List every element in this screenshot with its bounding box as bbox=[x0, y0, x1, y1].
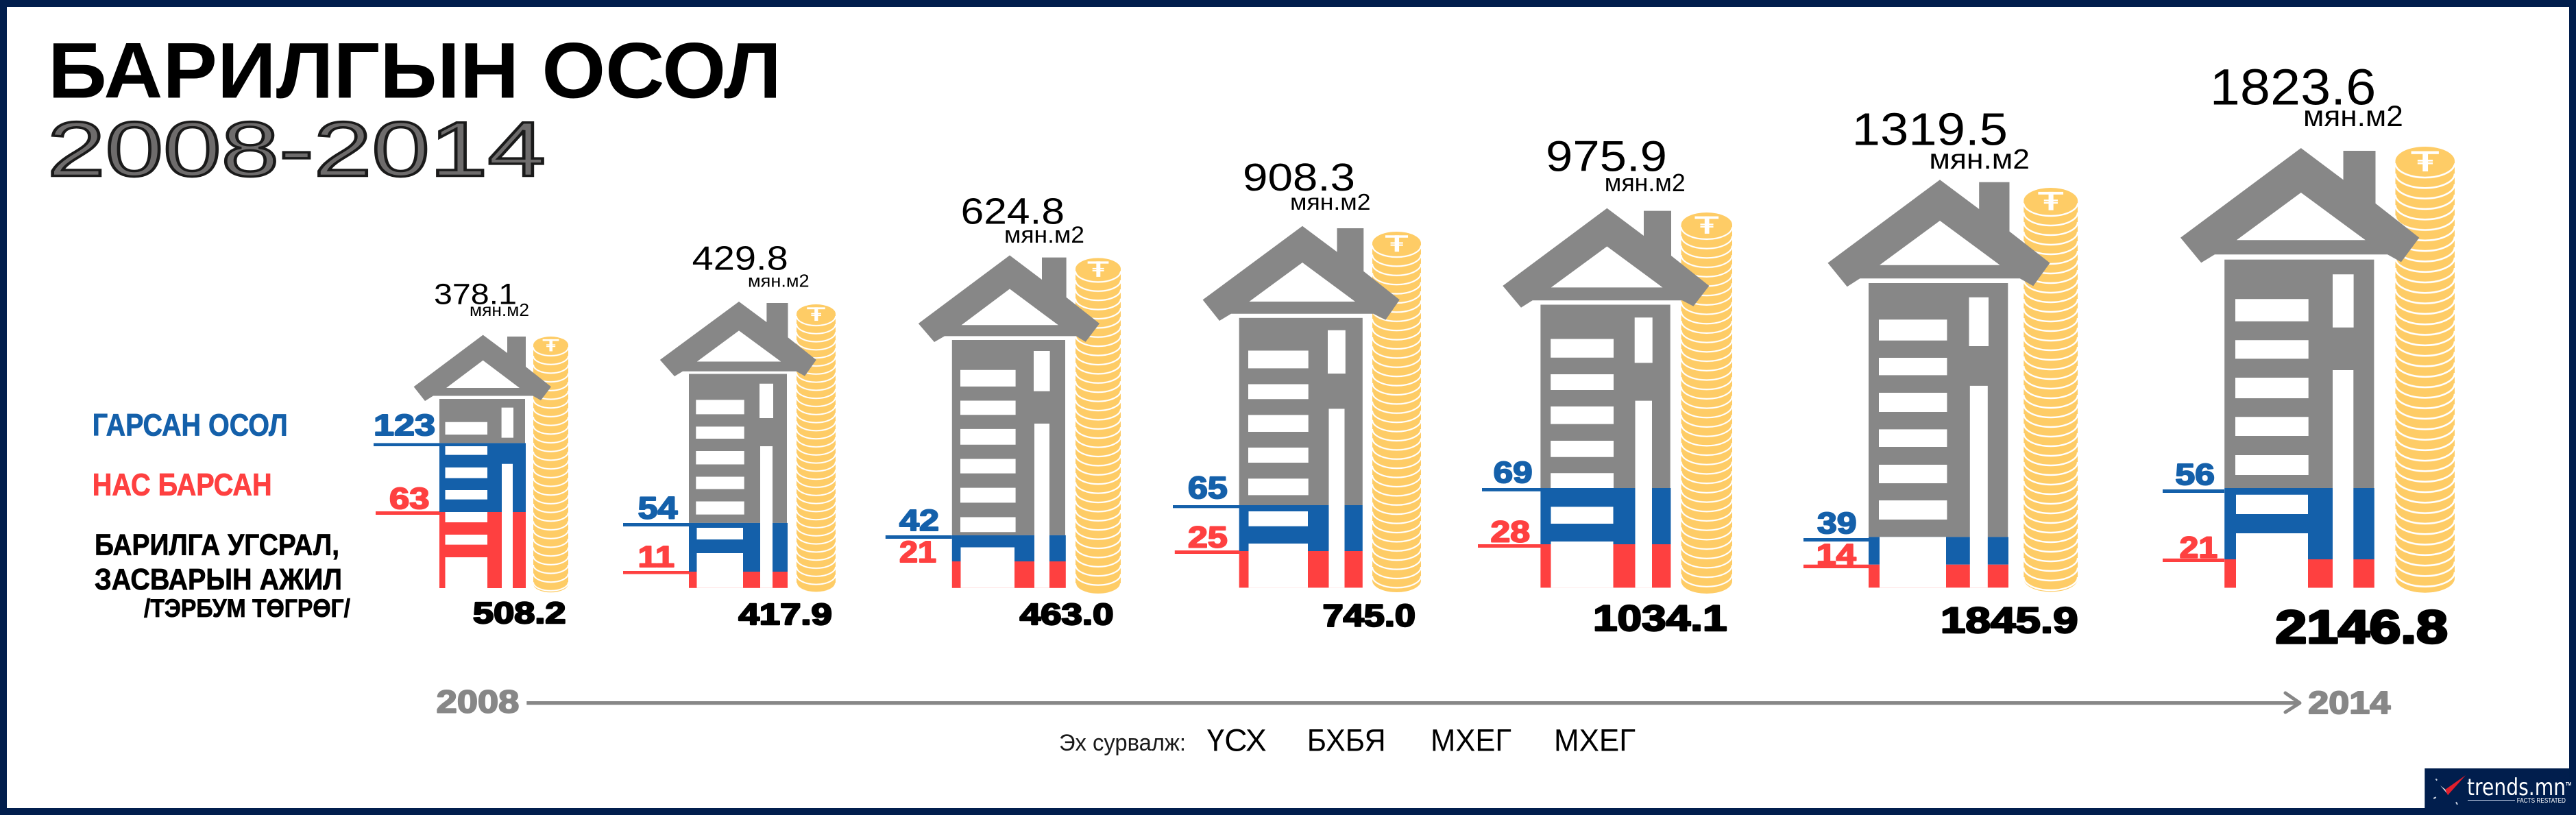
icon: house 2012 bbox=[1503, 208, 1709, 587]
legend: construction value: ЗАСВАРЫН АЖИЛ bbox=[95, 563, 342, 596]
accidents 65: 65 bbox=[1188, 470, 1228, 505]
year 2010 bbox=[886, 191, 1121, 631]
deaths line bbox=[1175, 550, 1239, 554]
timeline end 2014: 2014 bbox=[2308, 685, 2391, 720]
arrow bbox=[526, 693, 2300, 712]
deaths 11: 11 bbox=[638, 540, 675, 574]
area 1319.5: 1319.5 bbox=[1852, 104, 2008, 156]
source line: МХЕГ bbox=[1431, 723, 1511, 758]
tagline: FACTS RESTATED bbox=[2517, 797, 2566, 805]
accidents line bbox=[1803, 538, 1869, 542]
legend bbox=[93, 408, 350, 622]
year 2013 bbox=[1803, 104, 2078, 641]
deaths 25: 25 bbox=[1188, 520, 1228, 554]
deaths line bbox=[2163, 559, 2224, 562]
legend: deaths: НАС БАРСАН bbox=[93, 467, 272, 502]
value 508.2: 508.2 bbox=[473, 596, 566, 630]
accidents line bbox=[886, 535, 952, 539]
accidents 39: 39 bbox=[1817, 507, 1857, 540]
accidents line bbox=[1173, 505, 1239, 508]
unit: мян.м2 bbox=[2303, 100, 2403, 133]
icon: coin stack 2009 bbox=[797, 304, 836, 592]
source line: БХБЯ bbox=[1307, 723, 1386, 758]
deaths 21: 21 bbox=[2180, 531, 2217, 565]
trademark: TM bbox=[2566, 782, 2571, 787]
icon: coin stack 2010 bbox=[1076, 258, 1121, 594]
unit: мян.м2 bbox=[1004, 222, 1084, 248]
timeline bbox=[437, 684, 2391, 720]
deaths 63: 63 bbox=[389, 482, 429, 515]
deaths line bbox=[1478, 544, 1541, 548]
unit: мян.м2 bbox=[1929, 143, 2030, 175]
area 378.1: 378.1 bbox=[434, 278, 517, 311]
timeline start 2008: 2008 bbox=[437, 684, 519, 720]
source line: ҮСХ bbox=[1207, 723, 1267, 758]
year 2012 bbox=[1478, 133, 1732, 639]
accidents 42: 42 bbox=[899, 504, 939, 537]
value 417.9: 417.9 bbox=[739, 598, 832, 631]
unit: мян.м2 bbox=[1290, 189, 1371, 215]
accidents 54: 54 bbox=[638, 490, 677, 525]
area 975.9: 975.9 bbox=[1546, 133, 1667, 181]
area 429.8: 429.8 bbox=[692, 241, 788, 278]
icon: coin stack 2008 bbox=[533, 337, 568, 592]
icon: coin stack 2012 bbox=[1681, 212, 1732, 594]
year 2008 bbox=[374, 278, 568, 630]
icon: house 2011 bbox=[1203, 226, 1400, 587]
deaths line bbox=[623, 571, 689, 574]
year 2009 bbox=[623, 241, 836, 631]
title: БАРИЛГЫН ОСОЛ bbox=[48, 27, 781, 115]
icon: house 2009 bbox=[660, 302, 816, 588]
icon: coin stack 2013 bbox=[2024, 188, 2078, 592]
value 1034.1: 1034.1 bbox=[1593, 598, 1727, 639]
legend: construction value: БАРИЛГА УГСРАЛ, bbox=[95, 528, 339, 562]
accidents 69: 69 bbox=[1494, 456, 1533, 489]
accidents 123: 123 bbox=[374, 409, 435, 442]
deaths 28: 28 bbox=[1490, 515, 1530, 548]
accidents 56: 56 bbox=[2175, 458, 2215, 491]
icon: check mark bbox=[2433, 775, 2466, 805]
source line bbox=[1059, 723, 1636, 758]
accidents line bbox=[623, 523, 689, 526]
accidents line bbox=[374, 443, 439, 446]
deaths line bbox=[376, 511, 439, 515]
accidents line bbox=[1482, 488, 1541, 491]
area 908.3: 908.3 bbox=[1243, 156, 1355, 199]
value 2146.8: 2146.8 bbox=[2276, 601, 2448, 653]
logo: trends.mn bbox=[2425, 768, 2571, 810]
deaths line bbox=[1803, 565, 1869, 568]
year 2014 bbox=[2163, 59, 2455, 653]
tagline rule bbox=[2468, 800, 2515, 801]
source line: МХЕГ bbox=[1554, 723, 1636, 758]
subtitle: years: 2008-2014 bbox=[47, 106, 546, 192]
icon: house 2008 bbox=[414, 335, 551, 588]
area 1823.6: 1823.6 bbox=[2210, 59, 2376, 116]
value 745.0: 745.0 bbox=[1323, 598, 1415, 633]
legend: accidents: ГАРСАН ОСОЛ bbox=[93, 408, 288, 443]
accidents line bbox=[2163, 489, 2224, 493]
icon: coin stack 2014 bbox=[2395, 147, 2455, 593]
icon: coin stack 2011 bbox=[1372, 232, 1421, 592]
value 463.0: 463.0 bbox=[1020, 598, 1113, 631]
value 1845.9: 1845.9 bbox=[1941, 600, 2078, 641]
unit: мян.м2 bbox=[748, 270, 810, 291]
unit: мян.м2 bbox=[1605, 169, 1686, 197]
area 624.8: 624.8 bbox=[961, 191, 1065, 232]
icon: house 2014 bbox=[2180, 148, 2419, 588]
legend: construction value bbox=[95, 528, 350, 622]
deaths 21: 21 bbox=[899, 535, 936, 569]
icon: house 2013 bbox=[1827, 180, 2050, 587]
unit: мян.м2 bbox=[470, 300, 529, 320]
deaths 14: 14 bbox=[1816, 539, 1856, 572]
year 2011 bbox=[1173, 156, 1421, 633]
source line: Эх сурвалж: bbox=[1059, 730, 1186, 756]
legend: construction value: /ТЭРБУМ ТӨГРӨГ/ bbox=[144, 594, 350, 622]
icon: house 2010 bbox=[919, 255, 1099, 588]
